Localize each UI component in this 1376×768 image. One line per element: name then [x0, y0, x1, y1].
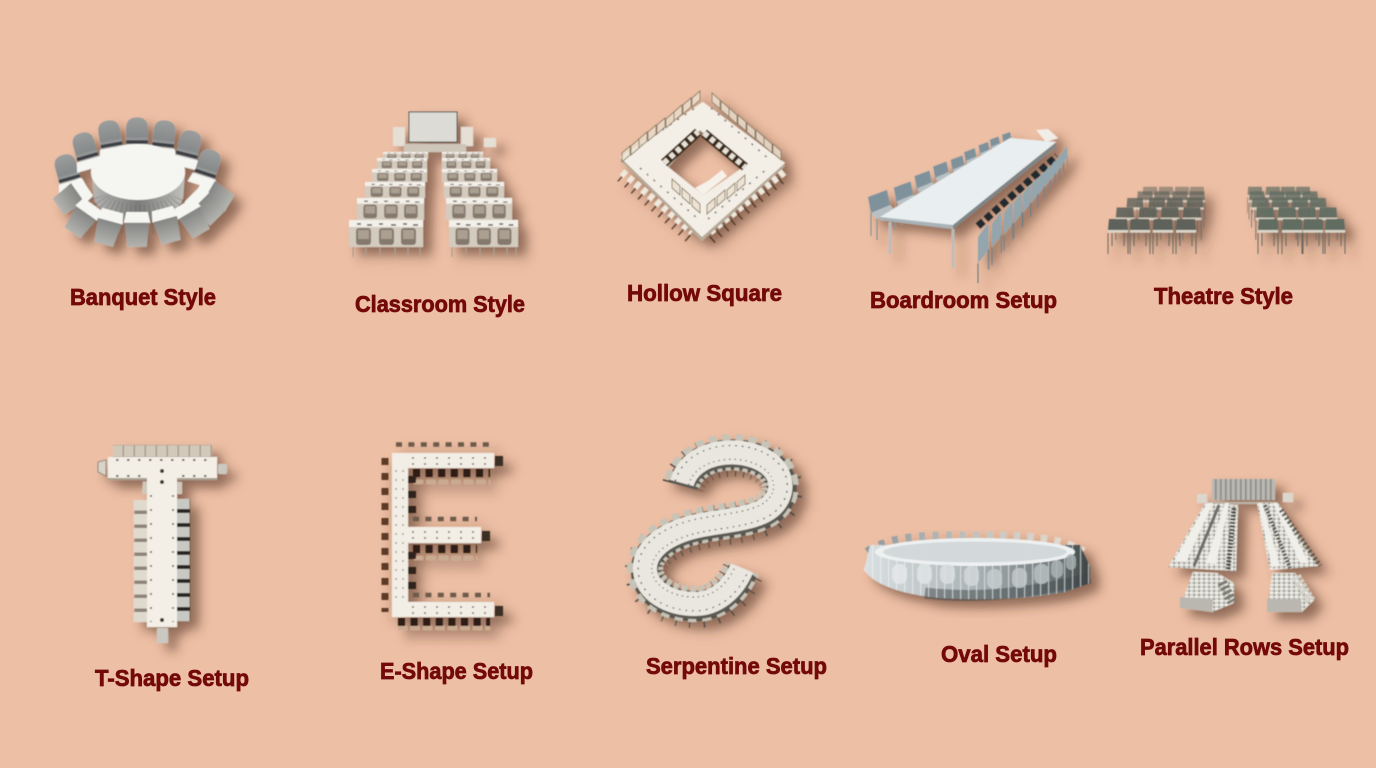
- icon: theatre chair block right: [1248, 187, 1345, 254]
- label: theatre style: Theatre Style: [1154, 283, 1293, 309]
- panel: banquet style: [49, 117, 236, 310]
- label: e-shape setup: E-Shape Setup: [380, 658, 533, 684]
- panel: theatre style: [1108, 187, 1345, 309]
- icon: e-shape table layout: [385, 444, 503, 628]
- icon: long boardroom table with chairs: [868, 129, 1067, 283]
- icon: oval conference table: [864, 537, 1090, 599]
- icon: parallel rows of tables: [1168, 479, 1320, 612]
- panel: parallel rows setup: [1140, 479, 1349, 660]
- panel: classroom style: [349, 112, 525, 317]
- panel: e-shape setup: [380, 444, 533, 684]
- label: t-shape setup: T-Shape Setup: [95, 665, 249, 691]
- icon: theatre chair block left: [1108, 187, 1205, 254]
- icon: t-shape table layout: [98, 451, 227, 643]
- panel: t-shape setup: [95, 451, 249, 691]
- icon: hollow square table layout: [620, 91, 785, 241]
- label: classroom style: Classroom Style: [355, 291, 525, 317]
- panel: oval setup: [864, 537, 1090, 667]
- label: parallel rows setup: Parallel Rows Setup: [1140, 634, 1349, 660]
- label: oval setup: Oval Setup: [941, 641, 1057, 667]
- label: serpentine setup: Serpentine Setup: [646, 653, 827, 679]
- icon: round banquet table with chairs: [49, 117, 236, 248]
- panel: boardroom setup: [868, 129, 1067, 313]
- panel: hollow square: [620, 91, 785, 306]
- label: hollow square: Hollow Square: [627, 280, 782, 306]
- panel: serpentine setup: [645, 452, 827, 679]
- label: banquet style: Banquet Style: [70, 284, 216, 310]
- icon: serpentine table layout: [645, 452, 781, 607]
- label: boardroom setup: Boardroom Setup: [870, 287, 1057, 313]
- icon: classroom rows facing a screen: [349, 112, 518, 257]
